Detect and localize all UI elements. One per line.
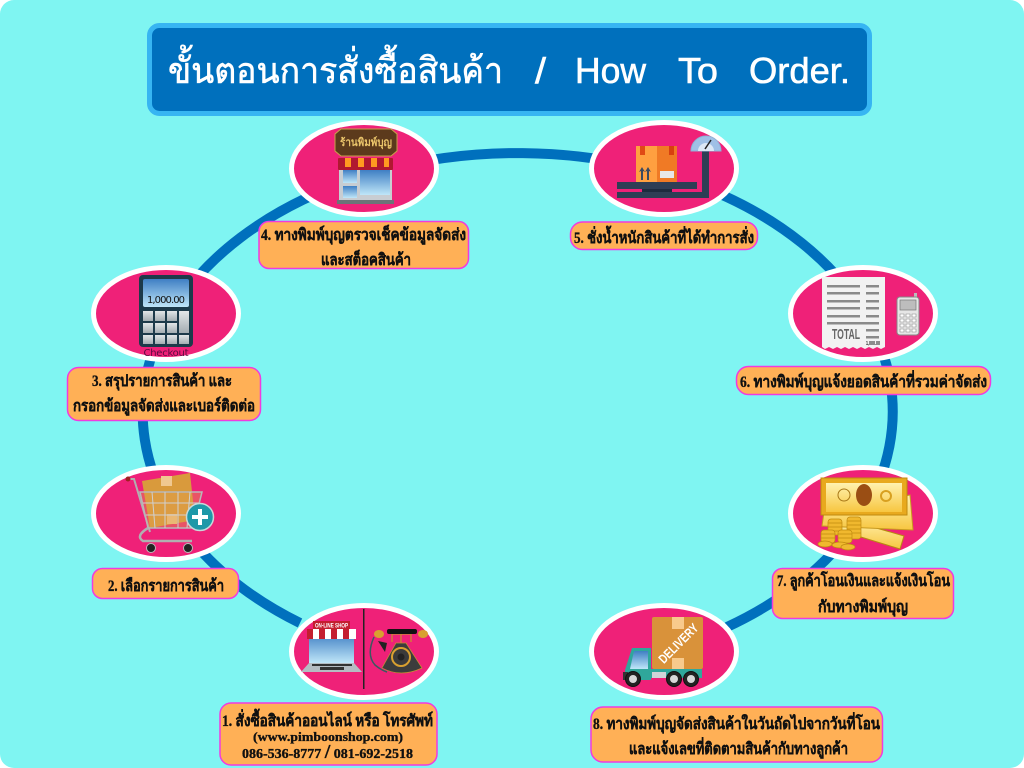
- label: step 4: [259, 222, 468, 269]
- label: step 2: [92, 568, 238, 598]
- title text: To: [678, 50, 718, 91]
- icon: shopping cart: [126, 473, 214, 552]
- step 8: delivery truck: [592, 606, 736, 698]
- label: step 1: 086-536-8777 / 081-692-2518: [242, 741, 413, 763]
- step 2: shopping cart: [94, 468, 238, 560]
- label: step 3: [68, 368, 260, 420]
- icon: laptop shop: ON-LINE SHOP: [315, 624, 348, 630]
- icon: mobile phone: [897, 293, 919, 335]
- step 1: laptop shop and telephone: [292, 606, 436, 698]
- label: step 1: (www.pimboonshop.com): [253, 729, 403, 744]
- step 7: money: [790, 468, 936, 560]
- icon: laptop shop: [301, 621, 362, 672]
- label: step 8: [591, 707, 882, 762]
- label: step 1: [220, 703, 437, 765]
- icon: receipt: [822, 277, 885, 349]
- step 5: scale: [592, 122, 736, 214]
- divider: [363, 609, 364, 689]
- label: step 3: กรอกข้อมูลจัดส่งและเบอร์ติดต่อ: [73, 396, 255, 417]
- icon: shop: [335, 129, 397, 204]
- icon: delivery truck: DELIVERY: [655, 620, 702, 666]
- label: step 8: และแจ้งเลขที่ติดตามสินค้ากับทางลูกค้า: [629, 737, 848, 760]
- label: step 4: และสต็อคสินค้า: [321, 248, 411, 269]
- label: step 8: 8. ทางพิมพ์บุญจัดส่งสินค้าในวันถัดไปจากวันที่โอน: [593, 712, 880, 734]
- label: step 6: 6. ทางพิมพ์บุญแจ้งยอดสินค้าที่รวมค่าจัดส่ง: [740, 370, 987, 392]
- icon: parcel scale: [617, 136, 721, 198]
- label: step 3: 3. สรุปรายการสินค้า และ: [92, 372, 232, 391]
- icon: banknotes and coins: [818, 478, 913, 550]
- icon: calculator: [139, 275, 193, 359]
- icon: shop: ร้านพิมพ์บุญ: [340, 136, 392, 150]
- title text: ขั้นตอนการสั่งซื้อสินค้า: [168, 44, 503, 91]
- icon: vintage telephone: [370, 629, 428, 673]
- step 3: calculator: [94, 268, 238, 360]
- icon: receipt: 1,000.00: [866, 341, 880, 347]
- icon: delivery truck: [623, 617, 703, 686]
- title text: How: [575, 50, 647, 91]
- label: step 5: 5. ชั่งน้ำหนักสินค้าที่ได้ทำการสั่ง: [574, 225, 754, 247]
- label: step 4: 4. ทางพิมพ์บุญตรวจเช็คข้อมูลจัดส่ง: [261, 223, 466, 246]
- step 4: shop: [292, 122, 436, 214]
- label: step 7: [772, 568, 954, 618]
- title text: Order.: [749, 50, 850, 91]
- connecting arc: [143, 153, 893, 627]
- label: step 5: [570, 222, 758, 250]
- icon: calculator: 1,000.00: [147, 295, 185, 306]
- label: step 7: 7. ลูกค้าโอนเงินและแจ้งเงินโอน: [777, 570, 950, 592]
- title text: /: [535, 50, 546, 91]
- icon: calculator: Checkout: [144, 348, 189, 359]
- icon: receipt: TOTAL: [832, 326, 860, 343]
- label: step 6: [736, 366, 990, 394]
- label: step 2: 2. เลือกรายการสินค้า: [108, 577, 224, 595]
- label: step 1: 1. สั่งซื้อสินค้าออนไลน์ หรือ โทรศัพท์: [222, 708, 433, 730]
- title text: [168, 44, 850, 91]
- title banner: [150, 26, 870, 114]
- step 6: receipt and phone: [790, 268, 936, 360]
- label: step 7: กับทางพิมพ์บุญ: [818, 597, 908, 617]
